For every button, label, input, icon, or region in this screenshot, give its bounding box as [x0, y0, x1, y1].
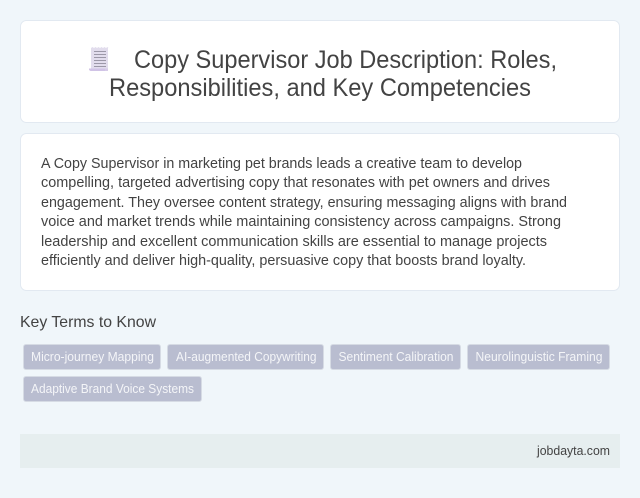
tag: Adaptive Brand Voice Systems: Adaptive Brand Voice Systems [31, 382, 194, 396]
text block: description: engagement. They oversee content strategy, ensuring messaging aligns with brand [41, 195, 567, 211]
tag: AI-augmented Copywriting: AI-augmented Copywriting [176, 350, 317, 364]
heading: Responsibilities, and Key Competencies [109, 74, 531, 102]
text block: description: efficiently and deliver high-quality, persuasive copy that boosts brand loyalty. [41, 253, 526, 269]
heading: Copy Supervisor Job Description: Roles, [134, 46, 557, 74]
tag: Neurolinguistic Framing [468, 344, 610, 370]
text block: description: leadership and excellent communication skills are essential to manage projects [41, 234, 547, 250]
panel: title [20, 20, 620, 122]
footer bar [20, 434, 620, 468]
panel: description [20, 134, 620, 290]
tag: AI-augmented Copywriting [168, 344, 324, 370]
tag: Sentiment Calibration: Sentiment Calibration [338, 350, 454, 364]
footer source text: jobdayta.com [536, 444, 610, 458]
term tags [24, 344, 610, 402]
tag: Micro-journey Mapping: Micro-journey Mapping [31, 350, 154, 364]
tag: Sentiment Calibration [330, 344, 460, 370]
tag: Neurolinguistic Framing: Neurolinguistic Framing [476, 350, 603, 364]
tag: Micro-journey Mapping [24, 344, 160, 370]
text block: description: voice and market trends while maintaining consistency across campaigns. Strong [41, 214, 561, 230]
text block: description [41, 156, 567, 269]
icon: document scroll [89, 47, 108, 71]
heading [109, 46, 557, 102]
heading: key terms: Key Terms to Know [20, 314, 156, 331]
tag: Adaptive Brand Voice Systems [24, 376, 202, 402]
text block: description: A Copy Supervisor in marketing pet brands leads a creative team to develop [41, 156, 522, 172]
text block: description: compelling, targeted advertising copy that resonates with pet owners and drives [41, 175, 550, 191]
